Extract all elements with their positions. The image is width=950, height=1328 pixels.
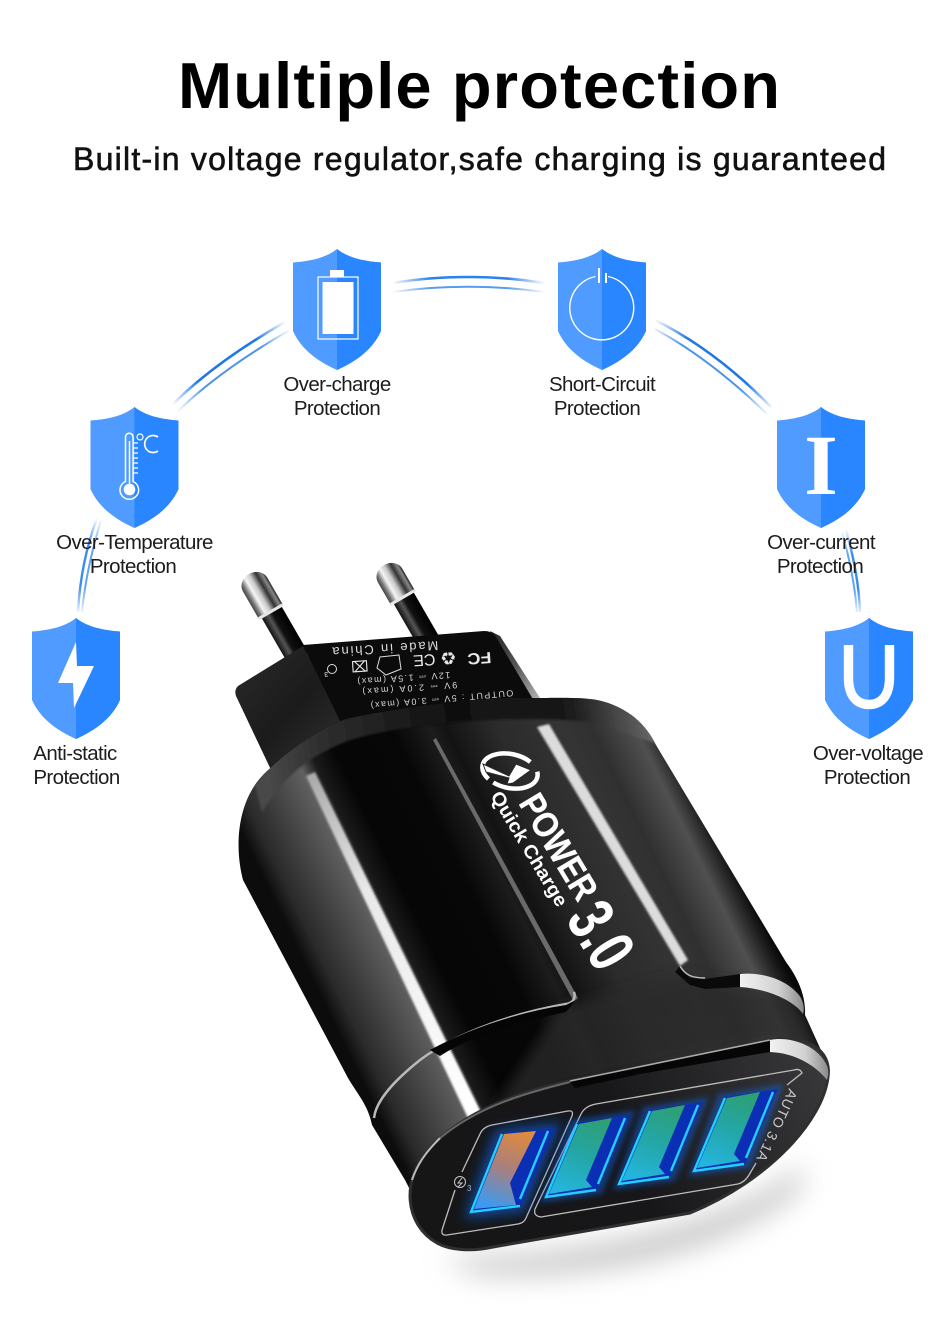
shield: over-current — [777, 407, 865, 528]
shield: anti-static — [32, 618, 120, 739]
label: over-temperature: Over-Temperature — [56, 531, 213, 554]
plug base: left face — [235, 646, 350, 772]
port: usb 1 — [540, 1110, 636, 1203]
port frame: auto — [535, 1069, 802, 1217]
label: over-temperature: Protection — [90, 555, 176, 578]
text: auto 3.1a: AUTO 3.1A — [753, 1087, 801, 1165]
logo: qc bolt ring — [479, 749, 541, 793]
arc: over-temperature to over-charge — [172, 322, 288, 411]
cast shadow — [440, 1165, 805, 1276]
shoulder band — [255, 695, 660, 812]
label: over-charge: Protection — [294, 397, 380, 420]
arc: anti-static to over-temperature — [78, 518, 101, 612]
marks: certification: ⌧ — [350, 656, 369, 674]
charger — [235, 562, 830, 1290]
port: usb 3 — [688, 1084, 784, 1177]
label: over-voltage: Protection — [824, 766, 910, 789]
icon: letter I: I — [804, 417, 838, 513]
port frame: qc — [442, 1111, 572, 1235]
port: usb 2 — [613, 1097, 709, 1190]
text: qc3 digit: 3 — [467, 1184, 472, 1193]
shield: over-voltage — [825, 618, 913, 739]
lower region between rings — [498, 984, 820, 1101]
text: output ratings — [357, 670, 514, 710]
marks: certification — [324, 647, 492, 677]
label: anti-static: Protection — [33, 766, 120, 789]
rim highlights — [412, 1138, 440, 1180]
icon: thermometer — [120, 433, 158, 499]
text: quick charge: Quick Charge — [486, 788, 571, 911]
text: output ratings: 12V ⎓ 1.5A (max) — [357, 670, 451, 686]
icon: lightning bolt — [58, 642, 94, 708]
text: output ratings: OUTPUT : 5V ⎓ 3.0A (max) — [370, 688, 514, 710]
shield: short-circuit — [558, 249, 646, 370]
icon: power ring — [570, 268, 634, 340]
text: made in china: Made in China — [331, 638, 439, 659]
title: Multiple protection — [178, 49, 780, 122]
marks: certification: ♻ — [440, 647, 457, 668]
arc: over-charge to short-circuit — [393, 277, 544, 292]
label: anti-static: Anti-static — [33, 742, 117, 765]
label: over-current: Over-current — [767, 531, 875, 554]
icon: battery — [318, 270, 358, 339]
arc: short-circuit to over-current — [655, 320, 771, 414]
text: power: POWER — [511, 786, 607, 907]
plug base: right side — [490, 631, 540, 700]
label: over-charge: Over-charge — [283, 373, 391, 396]
plug pin: right — [372, 558, 445, 657]
shield: over-temperature — [90, 407, 178, 528]
plug pin: left — [237, 567, 310, 666]
ring: left segment — [374, 992, 576, 1118]
label: over-voltage: Over-voltage — [813, 742, 923, 765]
white band — [537, 724, 688, 966]
arc: over-current to over-voltage — [842, 530, 860, 612]
text: output ratings: 9V ⎓ 2.0A (max) — [362, 680, 458, 697]
charger body — [238, 698, 830, 1188]
ring: right segment — [675, 966, 804, 1014]
plug base: top face with markings — [303, 631, 534, 725]
marks: certification: FC — [466, 648, 492, 667]
marks: certification: 3 — [324, 670, 328, 677]
front face — [410, 1039, 828, 1250]
label: short-circuit: Protection — [554, 397, 640, 420]
icon: letter U — [848, 645, 890, 704]
icon: qc3 mark — [454, 1176, 466, 1188]
marks: certification: CE — [413, 650, 436, 669]
subtitle: Built-in voltage regulator,safe charging is guaranteed — [73, 141, 886, 177]
shield: over-charge — [293, 249, 381, 370]
label: over-current: Protection — [777, 555, 863, 578]
label: short-circuit: Short-Circuit — [549, 373, 655, 396]
left highlight strip — [306, 772, 481, 1118]
text: 3.0: 3.0 — [553, 888, 650, 982]
port: qc usb — [464, 1122, 562, 1219]
centre panel edge line — [433, 738, 578, 1002]
